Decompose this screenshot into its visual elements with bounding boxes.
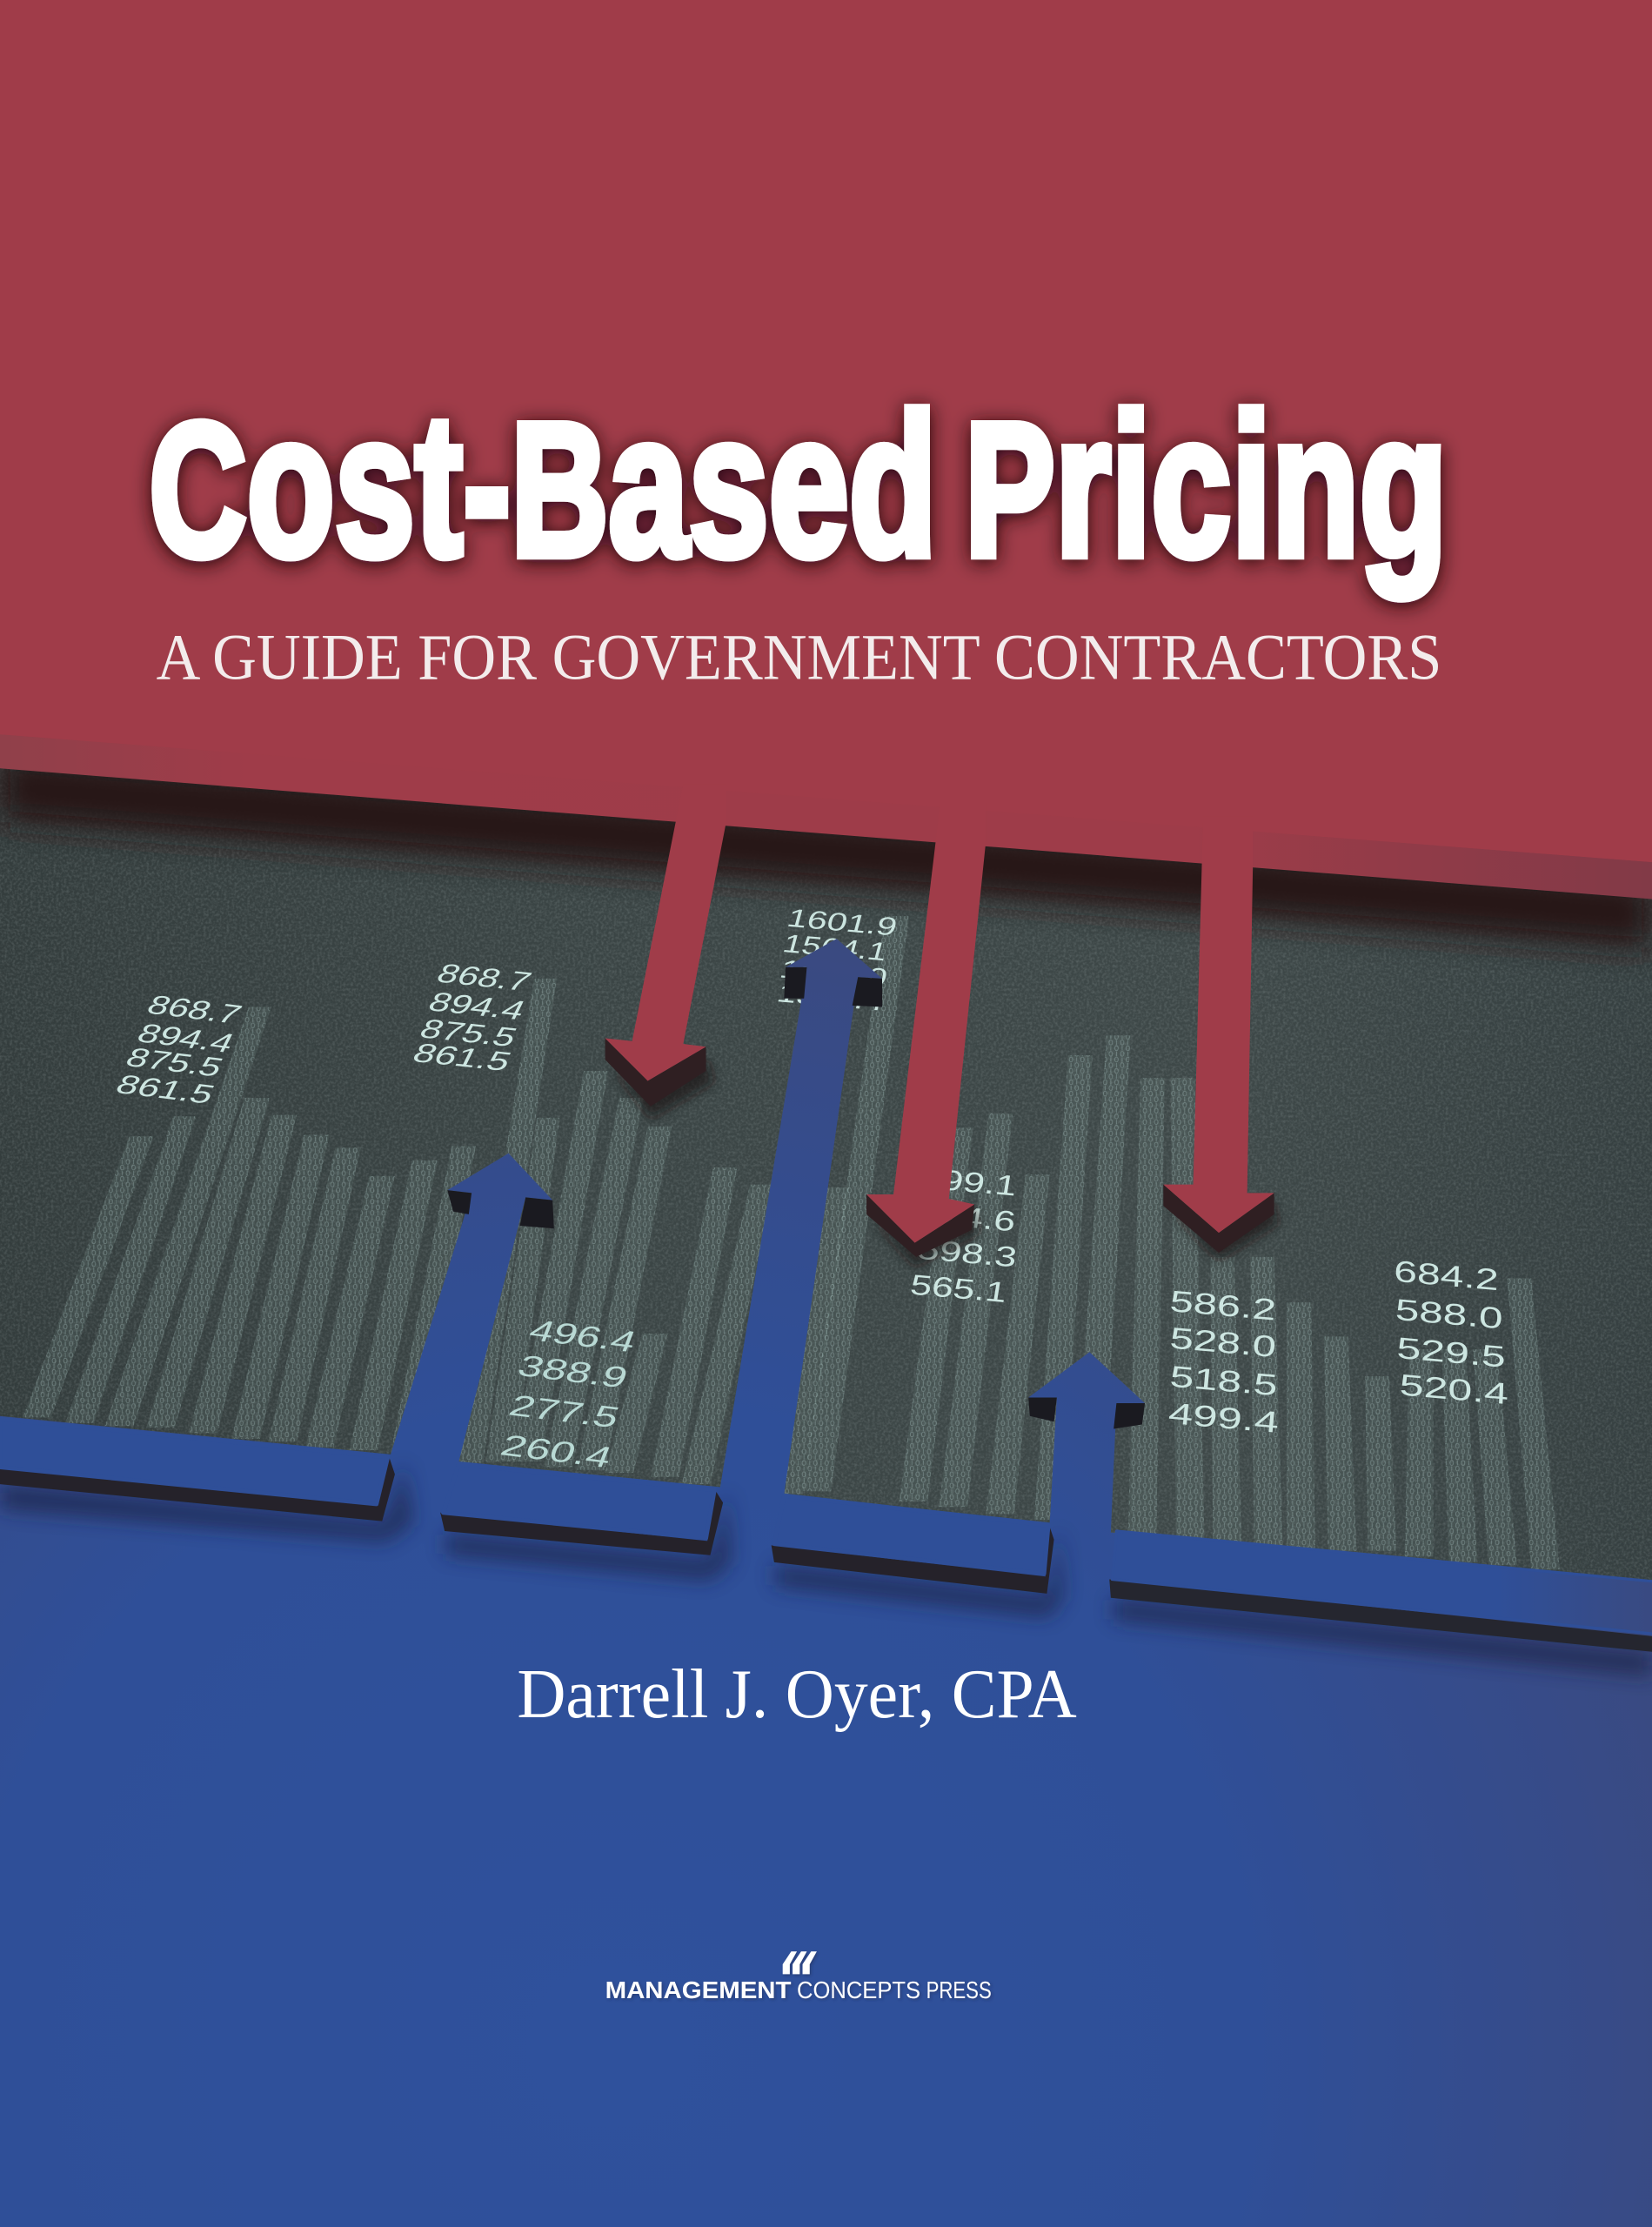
author: Darrell J. Oyer, CPA [517, 1656, 1077, 1733]
number labels: group 6: 528.0 [1168, 1322, 1277, 1364]
blue floor and up arrows [0, 939, 1652, 2227]
number labels: group 5 [908, 1161, 1020, 1308]
icon: logo stripes [783, 1951, 817, 1974]
blue strip 4 [1109, 1531, 1652, 1652]
number labels: group 4: 1601.9 [784, 904, 900, 941]
blue strip 3 [772, 1495, 1054, 1594]
red arrow 3 [1163, 817, 1279, 1261]
number labels: group 2: 894.4 [424, 986, 531, 1026]
red top surface [0, 0, 1652, 862]
publisher name: PRESS [926, 1976, 992, 2003]
number labels: group 3: 260.4 [496, 1428, 617, 1475]
number labels: group 2 [408, 958, 537, 1077]
icon: blue arrow 1 head underside [447, 1190, 554, 1228]
number labels: group 4: 1564.1 [779, 930, 891, 966]
number labels: group 6: 586.2 [1168, 1285, 1277, 1328]
number labels: group 4: 1589.0 [777, 955, 891, 993]
title: Cost-Based Pricing [149, 372, 1448, 599]
number labels: group 3: 496.4 [525, 1314, 641, 1359]
number labels: group 6: 518.5 [1168, 1361, 1279, 1402]
blue strip 1 [0, 1419, 395, 1521]
red arrow 2 [866, 802, 986, 1267]
number labels: group 1: 861.5 [110, 1069, 220, 1109]
icon: blue arrow 2 head underside [784, 967, 882, 1007]
number labels: group 5: 599.1 [918, 1161, 1020, 1201]
number labels: group 6 [1167, 1285, 1281, 1440]
number labels: group 2: 868.7 [431, 958, 537, 997]
red arrow 1 [605, 784, 726, 1120]
publisher name: MANAGEMENT [605, 1976, 792, 2003]
number labels: group 1: 875.5 [121, 1042, 229, 1082]
number labels: group 6: 499.4 [1167, 1397, 1281, 1440]
blue strip 2 [440, 1464, 723, 1555]
number labels: group 7: 520.4 [1399, 1368, 1509, 1411]
number labels: group 4: 1570.4 [774, 980, 887, 1017]
publisher logo [605, 1951, 992, 2003]
number labels: group 1 [110, 989, 247, 1109]
publisher name [605, 1976, 992, 2003]
panel: dark data board [0, 752, 1652, 1605]
number labels: group 7: 684.2 [1394, 1255, 1499, 1297]
number labels: group 5: 565.1 [908, 1268, 1009, 1308]
icon: blue arrow 3 head underside [1028, 1398, 1145, 1428]
number labels: group 5: 598.3 [915, 1233, 1020, 1273]
number labels: group 7: 588.0 [1395, 1294, 1503, 1336]
bar chart: binary columns [23, 916, 1560, 1569]
number labels: group 3: 277.5 [505, 1389, 624, 1435]
shadow under red edge [0, 752, 1652, 949]
red surface edge [0, 734, 1652, 899]
subtitle: A GUIDE FOR GOVERNMENT CONTRACTORS [157, 621, 1441, 693]
shadow under blue strips [0, 1463, 1652, 1676]
number labels: group 5: 574.6 [917, 1197, 1018, 1237]
number labels: group 7 [1394, 1255, 1509, 1411]
number labels: group 7: 529.5 [1396, 1332, 1506, 1374]
number labels: group 3: 388.9 [513, 1349, 632, 1394]
number labels: group 4 [774, 904, 900, 1017]
number labels: group 2: 861.5 [408, 1038, 517, 1077]
number labels: group 2: 875.5 [415, 1013, 522, 1053]
number labels: group 3 [496, 1314, 641, 1475]
number labels: group 1: 868.7 [142, 989, 247, 1029]
number labels: group 1: 894.4 [132, 1018, 240, 1058]
publisher name: CONCEPTS [797, 1976, 920, 2003]
